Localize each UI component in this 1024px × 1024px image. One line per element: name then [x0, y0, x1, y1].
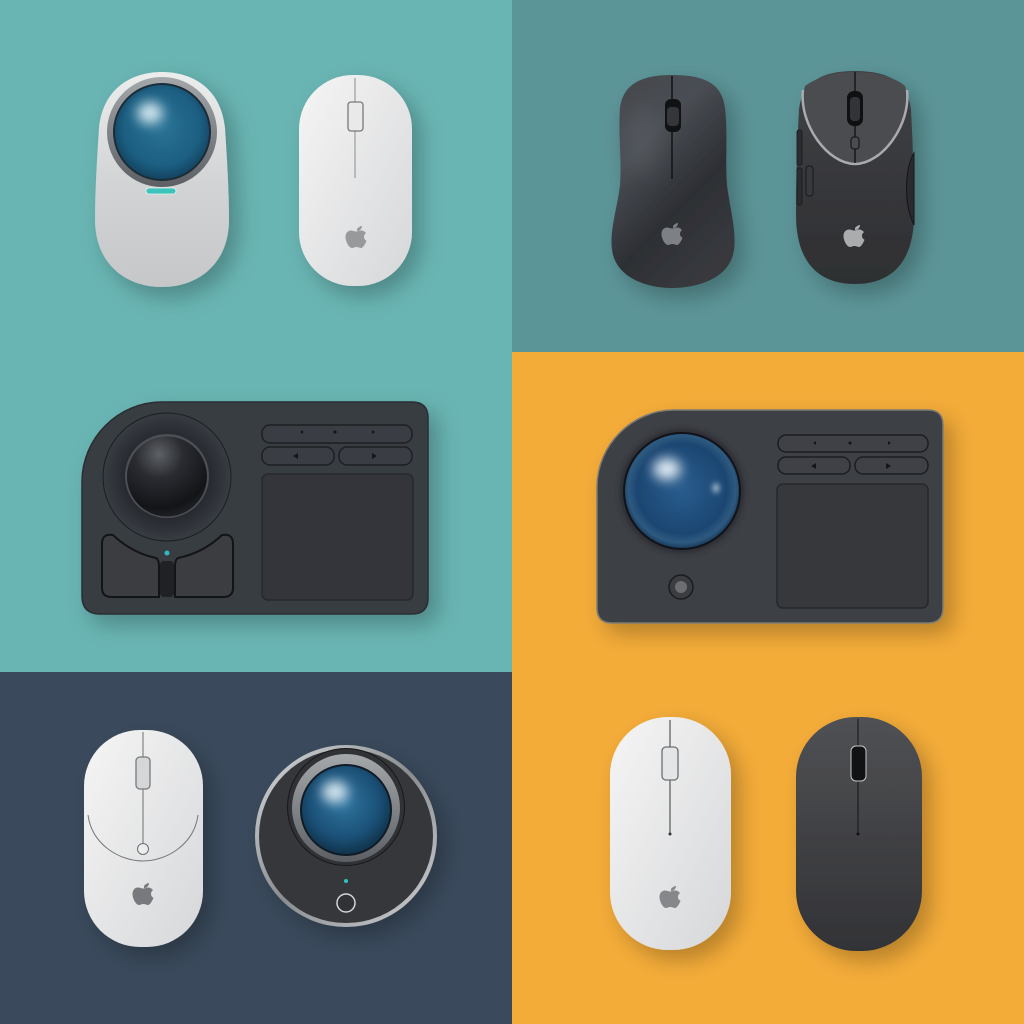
device: white mouse orange panel — [610, 717, 731, 950]
device: dark mouse orange panel — [796, 717, 922, 951]
device: round trackball — [255, 745, 437, 927]
panel: navy background — [0, 672, 512, 1024]
device: black mouse contoured — [612, 75, 735, 288]
panel: orange background — [512, 352, 1024, 1024]
device: dark trackball pad left — [82, 402, 428, 614]
panel: teal background — [0, 0, 512, 672]
device: white trackball capsule — [95, 72, 229, 287]
device: white mouse top left — [299, 75, 412, 286]
device: dark trackball pad right — [597, 410, 943, 623]
panel: dark teal background — [512, 0, 1024, 352]
device: white mouse navy panel — [84, 730, 203, 947]
device: black gaming mouse — [796, 71, 914, 284]
